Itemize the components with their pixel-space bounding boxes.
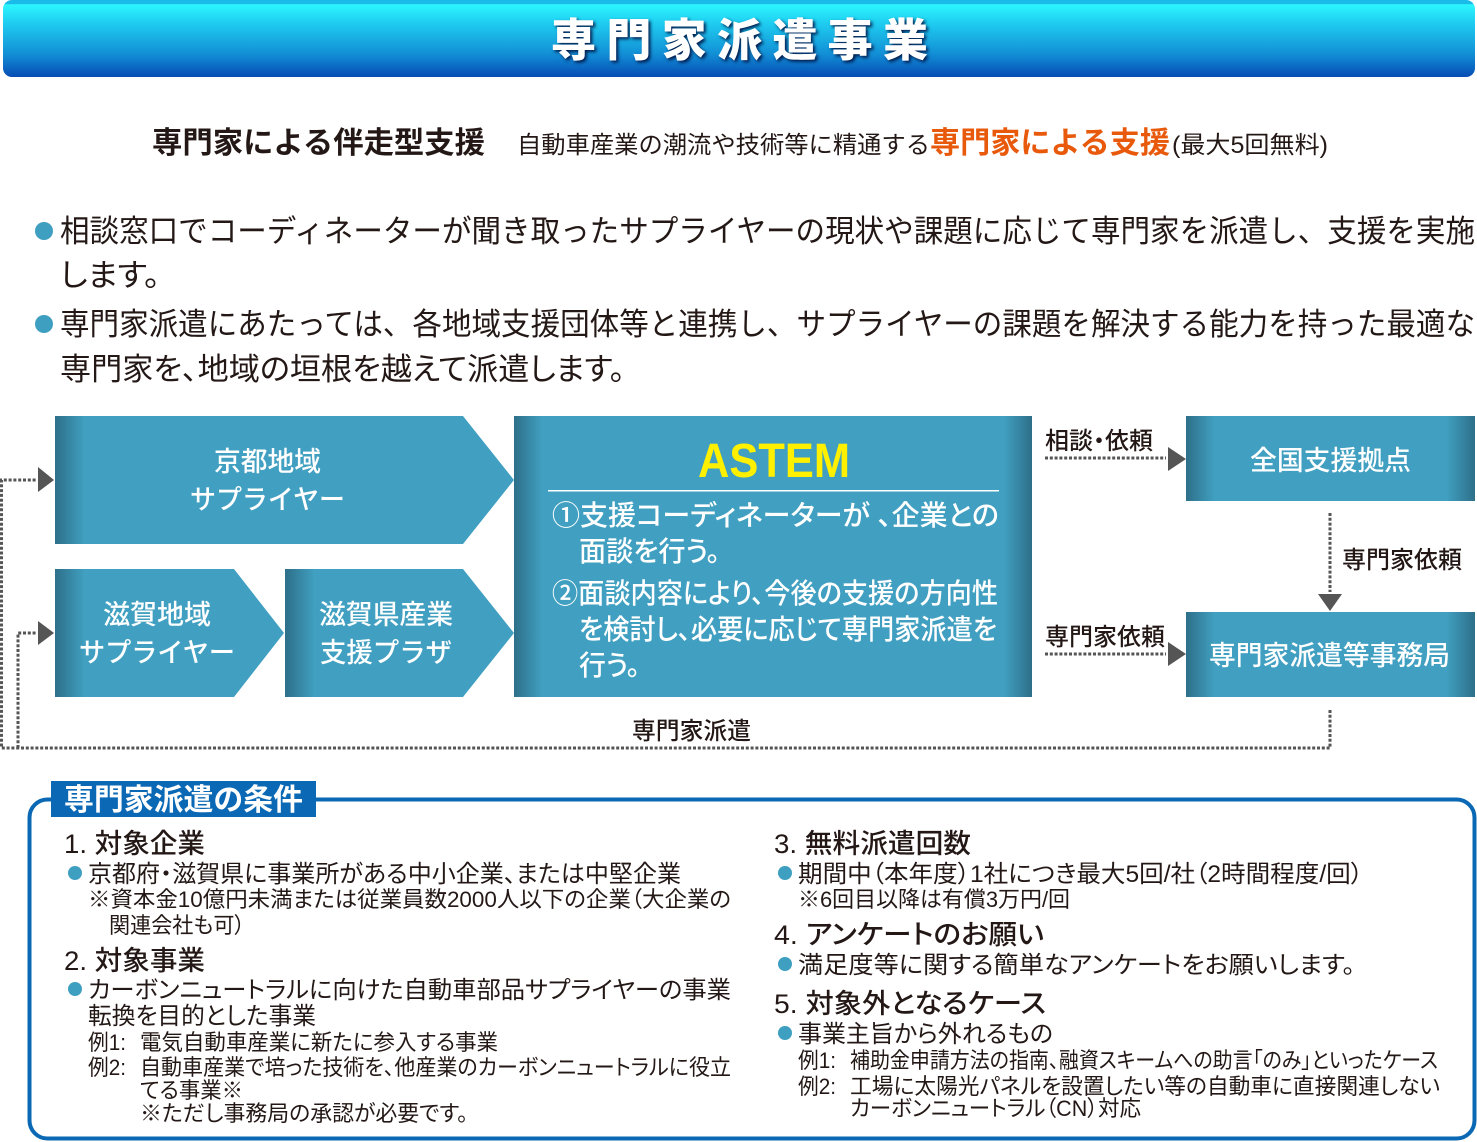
section 4: survey request xyxy=(774,920,1355,979)
section 2: target projects: 例2: xyxy=(88,1055,126,1080)
section 2: target projects: 電気自動車産業に新たに参入する事業 xyxy=(140,1030,498,1055)
section 4: survey request: 満足度等に関する簡単なアンケートをお願いします。 xyxy=(798,952,1355,979)
section 1: target companies: 京都府・滋賀県に事業所がある中小企業、または中堅企業 xyxy=(88,861,681,888)
section 2: target projects: カーボンニュートラルに向けた自動車部品サプライヤーの事業 xyxy=(88,977,731,1004)
panel: ASTEM: ①支援コーディネーターが 、企業との xyxy=(552,500,999,531)
section 4: survey request: 4. アンケートのお願い xyxy=(774,920,1044,950)
section 2: target projects xyxy=(64,946,731,1126)
title banner: 専門家派遣事業 xyxy=(551,15,928,66)
section 2: target projects: ※ただし事務局の承認が必要です。 xyxy=(140,1101,468,1126)
intro bullet points: 専門家を、地域の垣根を越えて派遣します。 xyxy=(60,352,625,387)
section 1: target companies: 1. 対象企業 xyxy=(64,829,205,859)
flow arrow: Shiga suppliers: 滋賀地域 xyxy=(103,600,211,630)
subtitle line: 専門家による伴走型支援 xyxy=(152,127,485,160)
section 3: number of free visits: 期間中（本年度）1社につき最大5回/社（2時間程度/回） xyxy=(798,861,1363,888)
flow arrow: Shiga industry support plaza: 滋賀県産業 xyxy=(319,600,453,630)
box: national support hub xyxy=(1186,416,1475,501)
section 2: target projects: 転換を目的とした事業 xyxy=(88,1003,316,1030)
subtitle line xyxy=(152,127,1328,160)
section 5: excluded cases xyxy=(774,989,1440,1121)
panel: ASTEM: を検討し、必要に応じて専門家派遣を xyxy=(579,614,997,645)
box: national support hub: 全国支援拠点 xyxy=(1250,446,1411,476)
subtitle line: 自動車産業の潮流や技術等に精通する xyxy=(517,132,930,159)
arrow: expert request to secretariat: 専門家依頼 xyxy=(1045,624,1165,651)
section 2: target projects: てる事業※ xyxy=(140,1078,243,1103)
arrow: consultation request xyxy=(1045,428,1186,471)
section 3: number of free visits: ※6回目以降は有償3万円/回 xyxy=(798,887,1070,912)
box: expert dispatch secretariat xyxy=(1186,612,1475,697)
flow arrow: Shiga industry support plaza xyxy=(285,569,514,697)
section 3: number of free visits: 3. 無料派遣回数 xyxy=(774,829,971,859)
arrow: expert dispatch loop: 専門家派遣 xyxy=(632,718,751,745)
panel: ASTEM: 行う。 xyxy=(579,650,640,681)
section 1: target companies xyxy=(64,829,731,938)
title banner xyxy=(3,0,1475,77)
intro bullet points xyxy=(35,214,1475,387)
section 1: target companies: ※資本金10億円未満または従業員数2000人以下の企業（大企業の xyxy=(88,887,731,912)
section 2: target projects: 2. 対象事業 xyxy=(64,946,205,976)
section 5: excluded cases: 工場に太陽光パネルを設置したい等の自動車に直接関連しない xyxy=(850,1074,1440,1099)
section 3: number of free visits xyxy=(774,829,1363,912)
flow arrow: Kyoto suppliers: サプライヤー xyxy=(190,485,345,515)
box: expert dispatch secretariat: 専門家派遣等事務局 xyxy=(1209,641,1450,671)
panel: ASTEM: 面談を行う。 xyxy=(579,536,720,567)
section 5: excluded cases: 例1: xyxy=(798,1048,836,1073)
arrow: expert request from hub: 専門家依頼 xyxy=(1342,547,1462,574)
section 5: excluded cases: カーボンニュートラル（CN）対応 xyxy=(850,1096,1141,1121)
section 1: target companies: 関連会社も可） xyxy=(109,913,245,938)
flow arrow: Kyoto suppliers xyxy=(55,416,514,544)
conditions heading: 専門家派遣の条件 xyxy=(64,784,303,817)
arrow: consultation request: 相談・依頼 xyxy=(1045,428,1153,455)
flow arrow: Shiga suppliers xyxy=(55,569,284,697)
section 2: target projects: 例1: xyxy=(88,1030,126,1055)
flow arrow: Shiga suppliers: サプライヤー xyxy=(79,638,235,668)
panel: ASTEM xyxy=(514,416,1032,697)
flow arrow: Shiga industry support plaza: 支援プラザ xyxy=(320,638,452,668)
flow arrow: Kyoto suppliers: 京都地域 xyxy=(214,447,321,477)
section 2: target projects: 自動車産業で培った技術を、他産業のカーボンニュートラルに役立 xyxy=(140,1055,731,1080)
section 5: excluded cases: 例2: xyxy=(798,1074,836,1099)
subtitle line: (最大5回無料) xyxy=(1172,132,1328,159)
arrow: expert dispatch loop xyxy=(2,467,1330,748)
arrow: expert request from hub xyxy=(1318,513,1462,611)
panel: ASTEM: ②面談内容により、今後の支援の方向性 xyxy=(552,578,998,609)
section 5: excluded cases: 事業主旨から外れるもの xyxy=(798,1021,1053,1048)
subtitle line: 専門家による支援 xyxy=(930,127,1170,160)
panel: dispatch conditions xyxy=(30,781,1474,1138)
panel: ASTEM: ASTEM xyxy=(698,435,850,488)
arrow: expert request to secretariat xyxy=(1045,624,1186,666)
intro bullet points: します。 xyxy=(60,258,160,293)
section 5: excluded cases: 5. 対象外となるケース xyxy=(774,989,1046,1019)
